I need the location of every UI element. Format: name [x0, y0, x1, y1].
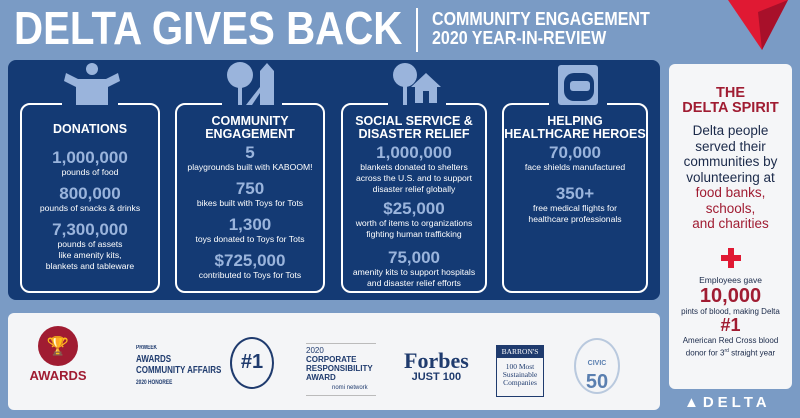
card: healthcare: 350+ — [556, 184, 594, 203]
card: social service — [341, 103, 487, 293]
text: volunteering: served their — [695, 138, 766, 154]
text: volunteering: schools, — [706, 200, 755, 216]
award: corporate responsibility: RESPONSIBILITY — [306, 364, 373, 373]
panel: delta spirit — [669, 64, 792, 389]
heading: the delta spirit: DELTA SPIRIT — [682, 100, 779, 116]
award: barrons: BARRON'S — [502, 347, 538, 356]
card: donations: 7,300,000 — [52, 220, 128, 239]
card: social service: amenity kits to support hospitals — [353, 267, 475, 277]
icon: delta logo — [728, 0, 788, 50]
card: donations: blankets and tableware — [46, 261, 134, 271]
card: donations: 800,000 — [59, 184, 121, 203]
card: healthcare: healthcare professionals — [528, 214, 622, 224]
card: community engagement: toys donated to Toys for Tots — [195, 234, 305, 244]
card: social service: 1,000,000 — [376, 143, 452, 162]
card: donations: pounds of snacks & drinks — [40, 203, 140, 213]
card: healthcare: HELPING — [547, 114, 603, 128]
award: forbes: JUST 100 — [412, 371, 461, 383]
award: awards badge — [29, 326, 87, 383]
panel: delta spirit: #1 — [720, 314, 741, 334]
card: healthcare: 70,000 — [549, 143, 601, 162]
card: social service: across the U.S. and to support — [356, 173, 472, 183]
logo: delta footer: ▲DELTA — [684, 394, 771, 411]
panel: delta spirit: donor for 3rd straight year — [686, 348, 775, 357]
panel: delta spirit: American Red Cross blood — [683, 336, 778, 344]
card: social service: DISASTER RELIEF — [358, 127, 470, 141]
icon: house storm — [393, 63, 441, 105]
text: volunteering: food banks, — [696, 185, 765, 200]
award: corporate responsibility: 2020 — [306, 346, 324, 355]
text: volunteering: Delta people — [693, 123, 768, 138]
card: healthcare: face shields manufactured — [525, 162, 625, 172]
card: social service: 75,000 — [388, 248, 440, 267]
award: prweek: AWARDS — [136, 354, 171, 365]
card: community engagement: bikes built with Toys for Tots — [197, 198, 303, 208]
award: forbes: Forbes — [404, 348, 469, 373]
card: donations: pounds of assets — [58, 239, 122, 249]
card: healthcare: HEALTHCARE HEROES — [504, 127, 646, 141]
award: prweek — [136, 345, 221, 386]
text: volunteering: volunteering at — [686, 170, 775, 184]
text: 2020 YEAR-IN-REVIEW — [432, 28, 606, 48]
text: volunteering: and charities — [692, 216, 769, 231]
award: barrons: Sustainable — [503, 370, 537, 379]
award: civic 50: 50 — [586, 371, 608, 393]
card: community engagement: ENGAGEMENT — [205, 127, 295, 141]
award: awards badge: AWARDS — [29, 368, 87, 383]
icon: playground — [227, 62, 274, 105]
card: social service: $25,000 — [383, 199, 445, 218]
text: blood: Employees gave — [699, 274, 762, 284]
award: civic 50 — [574, 338, 620, 394]
subtitle — [416, 8, 418, 52]
award: prweek: 2020 HONOREE — [136, 380, 172, 386]
panel: delta spirit: 10,000 — [700, 284, 761, 306]
award: corporate responsibility — [306, 343, 376, 396]
text: volunteering: communities by — [684, 154, 777, 169]
card: donations: DONATIONS — [53, 122, 127, 136]
title: DELTA GIVES BACK — [14, 2, 402, 54]
panel: awards — [8, 313, 660, 410]
icon: box — [64, 63, 120, 105]
icon: face shield — [558, 65, 598, 105]
heading: the delta spirit — [682, 85, 779, 116]
text: volunteering — [684, 123, 778, 231]
panel: delta spirit: pints of blood, making Delta — [681, 306, 780, 316]
card: donations: 1,000,000 — [52, 148, 128, 167]
card: social service: fighting human trafficking — [366, 229, 462, 239]
card: social service: worth of items to organizations — [356, 218, 472, 228]
award: corporate responsibility: AWARD — [306, 373, 336, 382]
card: community engagement: $725,000 — [215, 251, 285, 270]
card: community engagement — [175, 103, 325, 293]
award: corporate responsibility: CORPORATE — [306, 355, 357, 364]
card: healthcare — [502, 103, 648, 293]
card: community engagement: 750 — [236, 179, 264, 198]
award: barrons: 100 Most — [506, 362, 534, 371]
card: social service: disaster relief globally — [373, 184, 455, 194]
card: community engagement: 1,300 — [229, 215, 271, 234]
heading: the delta spirit: THE — [716, 85, 745, 101]
card: community engagement: contributed to Toys for Tots — [199, 270, 301, 280]
award: barrons: Companies — [503, 378, 537, 387]
award: barrons — [496, 345, 544, 397]
text: COMMUNITY ENGAGEMENT — [432, 9, 650, 29]
panel: main stats — [8, 60, 660, 300]
award: prweek: PRWEEK — [136, 345, 157, 351]
card: donations — [20, 103, 160, 293]
award: red cross #1 — [230, 337, 274, 389]
card: healthcare: free medical flights for — [533, 203, 617, 213]
card: community engagement: 5 — [245, 143, 255, 162]
card: community engagement: COMMUNITY — [211, 114, 289, 128]
award: civic 50: CIVIC — [588, 360, 606, 367]
award: prweek: COMMUNITY AFFAIRS — [136, 365, 221, 376]
card: donations: like amenity kits, — [58, 250, 122, 260]
card: social service: blankets donated to shelters — [360, 162, 468, 172]
card: donations: pounds of food — [62, 167, 118, 177]
award: corporate responsibility: nomi network — [332, 385, 368, 391]
award: red cross #1: #1 — [241, 351, 263, 373]
icon: red cross — [721, 248, 741, 268]
card: social service: and disaster relief efforts — [367, 278, 461, 288]
card: community engagement: playgrounds built with KABOOM! — [187, 162, 313, 172]
award: awards badge: 🏆 — [47, 336, 69, 356]
card: social service: SOCIAL SERVICE & — [355, 114, 473, 128]
